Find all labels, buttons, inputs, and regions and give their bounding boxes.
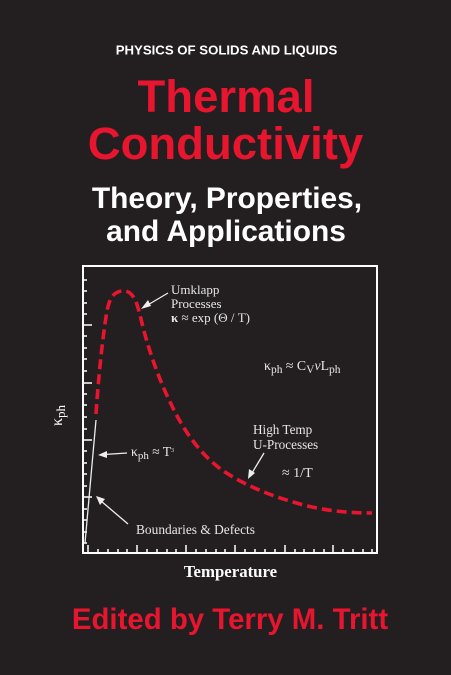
label: kappa formula: ≈ C — [282, 358, 306, 373]
red dashed curve — [96, 291, 372, 513]
label: Umklapp processes: κ ≈ exp (Θ / T) — [171, 310, 250, 325]
chart — [49, 266, 377, 581]
label: Umklapp processes: Umklapp — [171, 282, 219, 297]
label: T cubed: ph — [138, 450, 149, 462]
subtitle — [92, 182, 362, 248]
subtitle: Theory, Properties, — [92, 182, 362, 215]
label: kappa formula: V — [306, 364, 315, 376]
T cubed line — [85, 420, 96, 543]
arrow: Umklapp — [141, 293, 168, 309]
label: one over T: ≈ 1/T — [282, 466, 313, 481]
subtitle: and Applications — [106, 215, 346, 248]
label: T cubed: ≈ T — [149, 444, 172, 459]
label: Umklapp processes — [171, 282, 250, 325]
label: kappa formula: ph — [329, 364, 341, 376]
main title — [88, 71, 364, 169]
main title: Conductivity — [88, 118, 364, 169]
label: high temp U-processes: High Temp — [253, 422, 313, 437]
editor credit: Edited by Terry M. Tritt — [72, 603, 388, 636]
x axis label: Temperature — [184, 562, 278, 581]
y axis label: κ — [49, 418, 66, 426]
label: T cubed: κ — [131, 444, 138, 459]
label: kappa formula: L — [321, 358, 329, 373]
y axis label: ph — [53, 404, 68, 418]
axis ticks — [84, 280, 372, 552]
arrow: T cubed — [98, 451, 127, 458]
label: boundaries and defects: Boundaries & Defects — [136, 522, 255, 537]
label: high temp U-processes: U-Processes — [253, 437, 318, 452]
label: kappa formula: ν — [314, 358, 321, 373]
label: high temp U-processes — [253, 422, 318, 452]
arrow: high temp — [248, 453, 264, 479]
main title: Thermal — [137, 71, 315, 122]
label: T cubed: 3 — [171, 448, 174, 454]
label: kappa formula: κ — [264, 358, 271, 373]
label: Umklapp processes: Processes — [171, 296, 222, 311]
series title: PHYSICS OF SOLIDS AND LIQUIDS — [116, 42, 337, 58]
arrow: boundaries — [96, 496, 128, 524]
chart frame — [83, 266, 377, 553]
label: kappa formula: ph — [271, 364, 283, 376]
